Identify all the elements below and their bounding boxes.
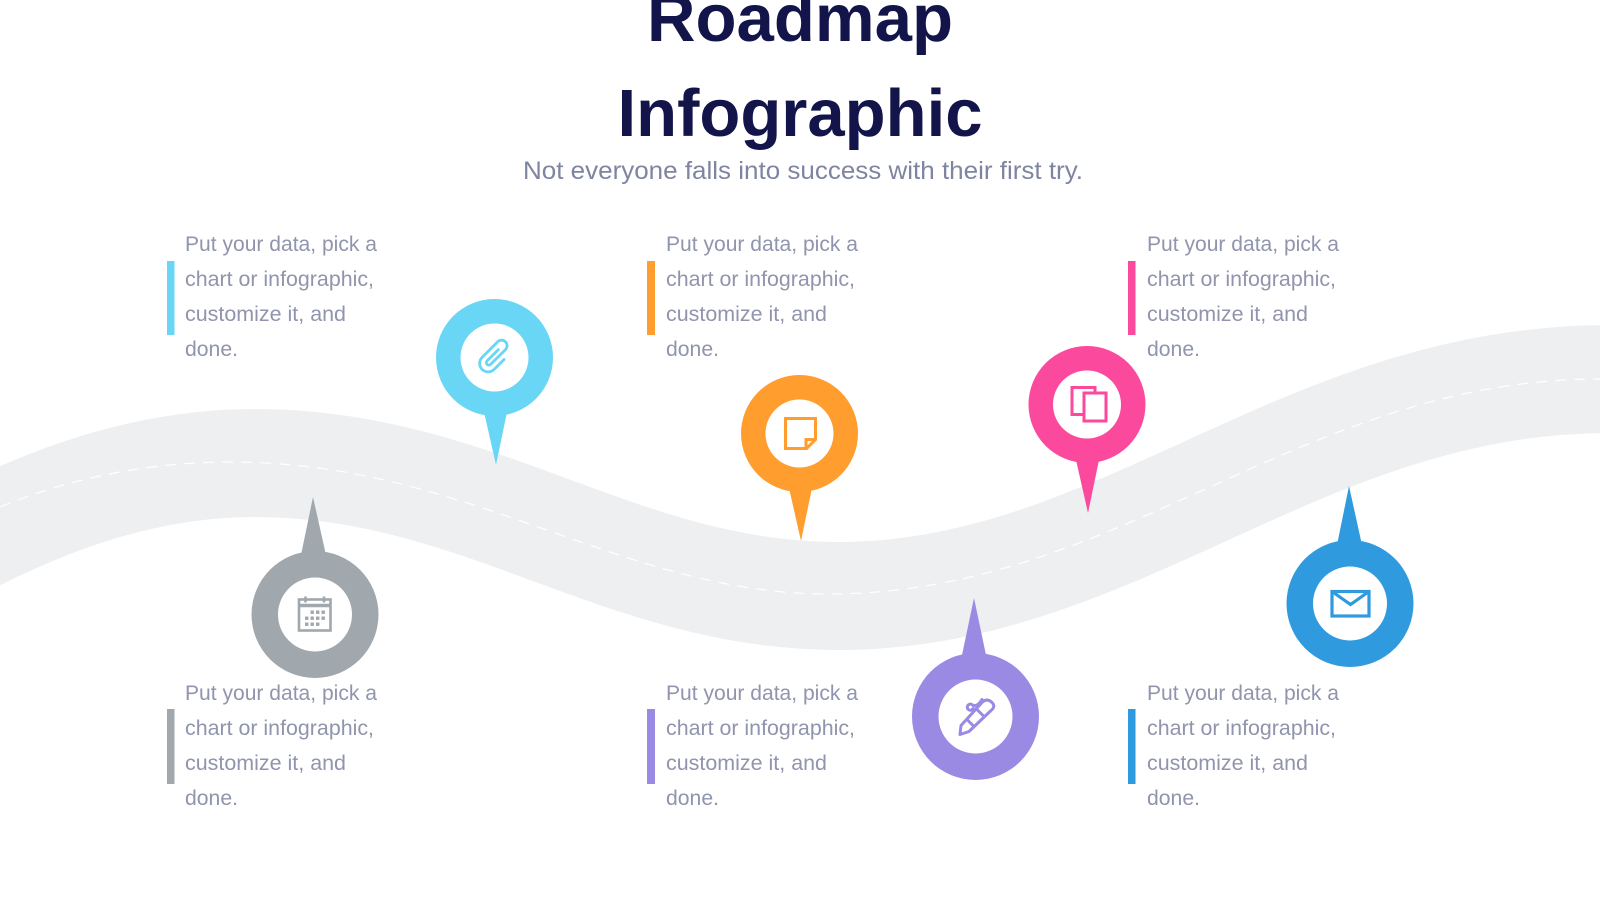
- text block: top right: done.: [1147, 338, 1200, 361]
- text block: top right: [1128, 233, 1339, 361]
- title: Infographic: [618, 76, 982, 151]
- text block: top centre: [647, 233, 858, 361]
- text block: bottom left: done.: [185, 787, 238, 810]
- text block: bottom right: Put your data, pick a: [1147, 682, 1339, 705]
- pin: calendar: [252, 497, 378, 678]
- text block: top left: [167, 233, 377, 361]
- text block: bottom centre: chart or infographic,: [666, 717, 855, 740]
- title: [618, 0, 982, 151]
- text block: top left: Put your data, pick a: [185, 233, 377, 256]
- text block: bottom centre: customize it, and: [666, 752, 827, 775]
- subtitle: Not everyone falls into success with their first try.: [523, 157, 1083, 185]
- text block: top left: chart or infographic,: [185, 268, 374, 291]
- text block: top left: done.: [185, 338, 238, 361]
- text block: top left: customize it, and: [185, 303, 346, 326]
- text block: top centre: chart or infographic,: [666, 268, 855, 291]
- pin: envelope: [1286, 486, 1414, 667]
- text block: bottom left: Put your data, pick a: [185, 682, 377, 705]
- text block: bottom left: customize it, and: [185, 752, 346, 775]
- text block: top centre: customize it, and: [666, 303, 827, 326]
- text block: top right: customize it, and: [1147, 303, 1308, 326]
- text block: bottom right: chart or infographic,: [1147, 717, 1336, 740]
- pin: sticky note: [741, 375, 858, 541]
- road: [0, 379, 1600, 596]
- text block: top right: chart or infographic,: [1147, 268, 1336, 291]
- text block: top centre: Put your data, pick a: [666, 233, 858, 256]
- text block: bottom left: [167, 682, 377, 810]
- text block: bottom centre: Put your data, pick a: [666, 682, 858, 705]
- text block: bottom right: [1128, 682, 1339, 810]
- text block: top centre: done.: [666, 338, 719, 361]
- text block: bottom centre: [647, 682, 858, 810]
- text block: bottom centre: done.: [666, 787, 719, 810]
- text block: bottom right: done.: [1147, 787, 1200, 810]
- text block: bottom right: customize it, and: [1147, 752, 1308, 775]
- pin: pen: [912, 598, 1039, 780]
- text block: bottom left: chart or infographic,: [185, 717, 374, 740]
- pin: paperclip: [436, 299, 553, 465]
- pin: documents: [1028, 346, 1146, 513]
- text block: top right: Put your data, pick a: [1147, 233, 1339, 256]
